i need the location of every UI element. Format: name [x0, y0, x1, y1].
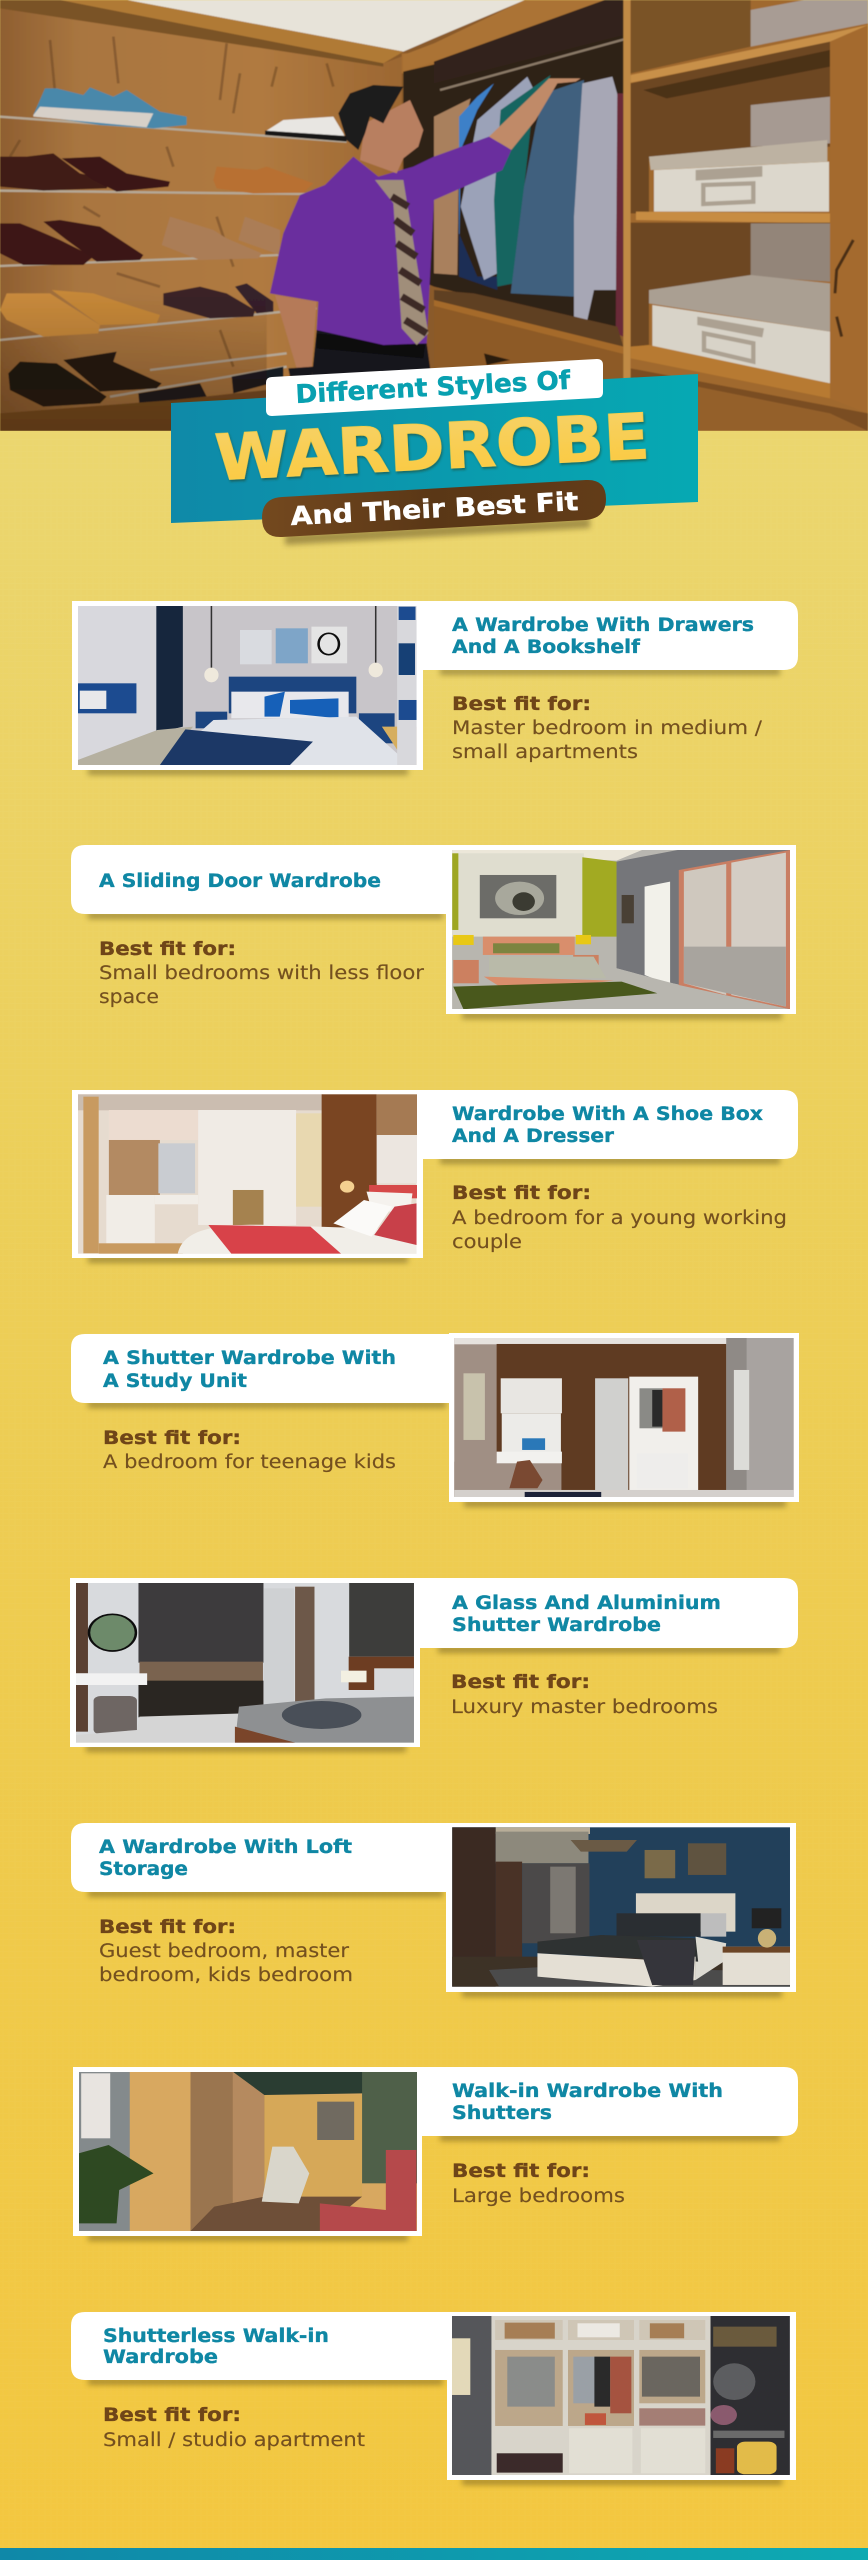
heading: Wardrobe: [103, 2347, 218, 2368]
photo: wood panel wall with study unit: [454, 1338, 794, 1497]
heading: [99, 1837, 352, 1880]
panel: walk-in wardrobe with shutters: [73, 2067, 798, 2241]
photo: dark glass wardrobe bedroom: [76, 1583, 414, 1743]
heading: And A Bookshelf: [452, 637, 641, 658]
best fit text: Master bedroom in medium /: [452, 718, 763, 739]
title card: [71, 1333, 799, 1502]
title card: [72, 1090, 798, 1258]
photo: open wardrobe with hanging clothes and drawers: [452, 2316, 790, 2475]
best fit text: [99, 1916, 353, 1986]
best fit text: A bedroom for a young working: [452, 1208, 787, 1229]
panel: sliding door wardrobe: [71, 845, 796, 1019]
panel: wardrobe with drawers and a bookshelf: [72, 601, 798, 775]
main word: WARDROBE: [213, 400, 651, 495]
shoes: [0, 87, 347, 410]
heading: Walk-in Wardrobe With: [452, 2081, 723, 2102]
heading: A Wardrobe With Loft: [99, 1837, 352, 1858]
best fit text: Best fit for:: [452, 1182, 591, 1204]
best fit text: Small / studio apartment: [103, 2430, 365, 2451]
title banner: [171, 359, 698, 545]
best fit text: Best fit for:: [99, 938, 236, 960]
brown subtitle pill: And Their Best Fit: [290, 487, 579, 532]
panel: shutterless walk-in wardrobe: [71, 2312, 796, 2485]
title card: [70, 1578, 798, 1747]
heading: [103, 1348, 396, 1392]
best fit text: Large bedrooms: [452, 2186, 625, 2207]
photo: white and red bedroom: [78, 1094, 418, 1254]
best fit text: A bedroom for teenage kids: [103, 1452, 396, 1473]
heading: A Sliding Door Wardrobe: [99, 871, 381, 892]
brown subtitle pill: [262, 480, 606, 545]
panel: shutter wardrobe with a study unit: [71, 1333, 799, 1507]
best fit text: bedroom, kids bedroom: [99, 1965, 353, 1986]
best fit text: Best fit for:: [103, 2404, 241, 2426]
shoe shelf rods: [0, 117, 347, 397]
shelving unit on right: [623, 0, 868, 431]
best fit text: [103, 1427, 396, 1473]
heading: Storage: [99, 1859, 188, 1880]
heading: A Glass And Aluminium: [452, 1593, 721, 1614]
heading: And A Dresser: [452, 1126, 615, 1147]
title card: [72, 601, 798, 770]
panel: glass and aluminium shutter wardrobe: [70, 1578, 798, 1752]
man: [270, 78, 581, 378]
photo: navy wall bedroom: [452, 1827, 790, 1987]
teal ribbon: [171, 374, 698, 523]
best fit text: [103, 2404, 365, 2451]
best fit text: Best fit for:: [451, 1671, 590, 1693]
best fit text: [451, 1671, 718, 1718]
photo: blue bedroom: [78, 606, 417, 765]
heading: [452, 1593, 721, 1636]
title card: [71, 845, 796, 1014]
best fit text: Best fit for:: [103, 1427, 241, 1449]
heading: Shutterless Walk-in: [103, 2326, 329, 2347]
heading: A Shutter Wardrobe With: [103, 1348, 396, 1369]
panel: wardrobe with loft storage: [71, 1823, 796, 1997]
title card: [73, 2067, 798, 2236]
white heading plate: [266, 359, 603, 416]
best fit text: space: [99, 987, 159, 1008]
title card: [71, 1823, 796, 1992]
best fit text: Best fit for:: [452, 2160, 590, 2182]
footer bar: [0, 2548, 868, 2560]
title card: [71, 2312, 796, 2480]
best fit text: Guest bedroom, master: [99, 1941, 349, 1962]
best fit text: Best fit for:: [99, 1916, 236, 1938]
white heading plate: Different Styles Of: [295, 366, 572, 410]
best fit text: [452, 2160, 625, 2207]
best fit text: small apartments: [452, 742, 638, 763]
photo: walk-in wardrobe with frosted shutters: [79, 2072, 418, 2231]
hero photo: man choosing clothes in a walk-in wardrobe: [0, 0, 868, 431]
best fit text: Small bedrooms with less floor: [99, 963, 424, 984]
best fit text: couple: [452, 1232, 522, 1253]
heading: A Study Unit: [103, 1371, 247, 1392]
panel: wardrobe with a shoe box and a dresser: [72, 1090, 798, 1263]
best fit text: [452, 693, 763, 763]
heading: [452, 1104, 763, 1147]
closet: [402, 0, 624, 365]
best fit text: Best fit for:: [452, 693, 591, 715]
heading: [452, 2081, 723, 2124]
heading: Shutters: [452, 2103, 552, 2124]
heading: [103, 2326, 329, 2368]
heading: Wardrobe With A Shoe Box: [452, 1104, 763, 1125]
best fit text: [452, 1182, 787, 1253]
best fit text: Luxury master bedrooms: [451, 1697, 718, 1718]
heading: [452, 615, 754, 658]
heading: Shutter Wardrobe: [452, 1615, 661, 1636]
heading: A Wardrobe With Drawers: [452, 615, 754, 636]
best fit text: [99, 938, 424, 1008]
photo: bedroom with salmon frame sliding doors: [452, 850, 790, 1009]
